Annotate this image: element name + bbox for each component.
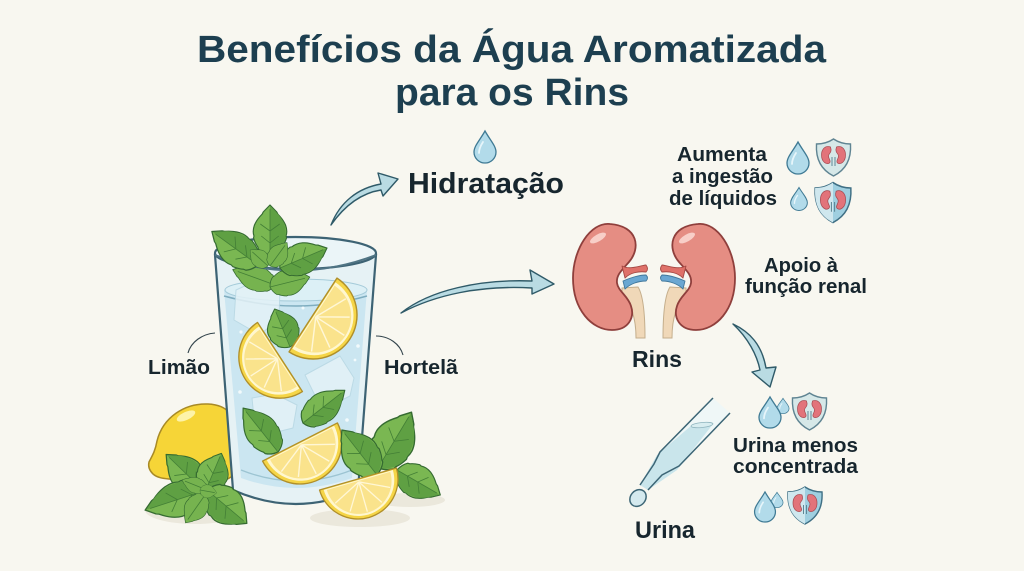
icons: drops and shields, intake: [787, 139, 851, 223]
text: increases fluid intake: [669, 144, 777, 210]
title: para os Rins: [395, 72, 629, 114]
illustration: glass with lemon and mint: [140, 205, 448, 537]
water: [224, 290, 367, 488]
glass rim: [215, 237, 376, 269]
connector: lemon label: [188, 333, 215, 353]
heading: hidratação: Hidratação: [408, 168, 564, 200]
lemon wedge left: [223, 322, 302, 414]
glass body: [215, 255, 376, 504]
mint in glass: [260, 303, 305, 353]
title: [197, 27, 827, 114]
rim front: [215, 255, 376, 270]
text: less concentrated urine: Urina menos: [733, 435, 858, 457]
lemon wedge lower: [263, 423, 356, 498]
illustration: urine pipette: [626, 398, 730, 510]
icon: hydration drop: [474, 131, 496, 163]
lemon wedge upper: [289, 278, 374, 376]
arrow: kidneys to urine: [733, 324, 776, 387]
connector: mint label: [376, 336, 403, 355]
arrow: glass to kidneys: [401, 270, 554, 313]
arteries: [622, 265, 686, 278]
text: kidney function support: Apoio à: [764, 255, 839, 277]
highlights: [588, 230, 697, 246]
icons: drops and shield, upper urine: [759, 393, 827, 430]
text: kidney function support: função renal: [745, 276, 867, 298]
right mint cluster: [328, 402, 448, 509]
arrow: glass to hydration: [331, 173, 398, 225]
whole lemon: [149, 404, 240, 485]
text: increases fluid intake: Aumenta: [677, 144, 768, 166]
bottom left mint cluster: [140, 443, 259, 537]
label: urine: Urina: [635, 517, 696, 544]
ureters: [622, 287, 686, 338]
top mint bunch: [202, 205, 333, 282]
ground shadows: [145, 493, 445, 527]
text: less concentrated urine: concentrada: [733, 456, 859, 478]
text: increases fluid intake: a ingestão: [672, 166, 773, 188]
label: kidneys: Rins: [632, 346, 682, 372]
text: increases fluid intake: de líquidos: [669, 188, 777, 210]
text: kidney function support: [745, 255, 867, 298]
label: lemon: Limão: [148, 357, 210, 379]
icons: drops and shield, lower urine: [755, 487, 822, 524]
label: mint: Hortelã: [384, 357, 459, 379]
bubbles: [238, 306, 360, 422]
title: Benefícios da Água Aromatizada: [197, 27, 827, 71]
mint behind rim: [228, 258, 313, 300]
ice cubes: [234, 279, 354, 432]
mint centre and lower left: [231, 379, 354, 462]
illustration: kidneys: [573, 224, 735, 338]
kidney shapes: [573, 224, 735, 330]
veins: [623, 275, 685, 289]
text: less concentrated urine: [733, 435, 859, 478]
front lemon wedge: [320, 468, 407, 528]
